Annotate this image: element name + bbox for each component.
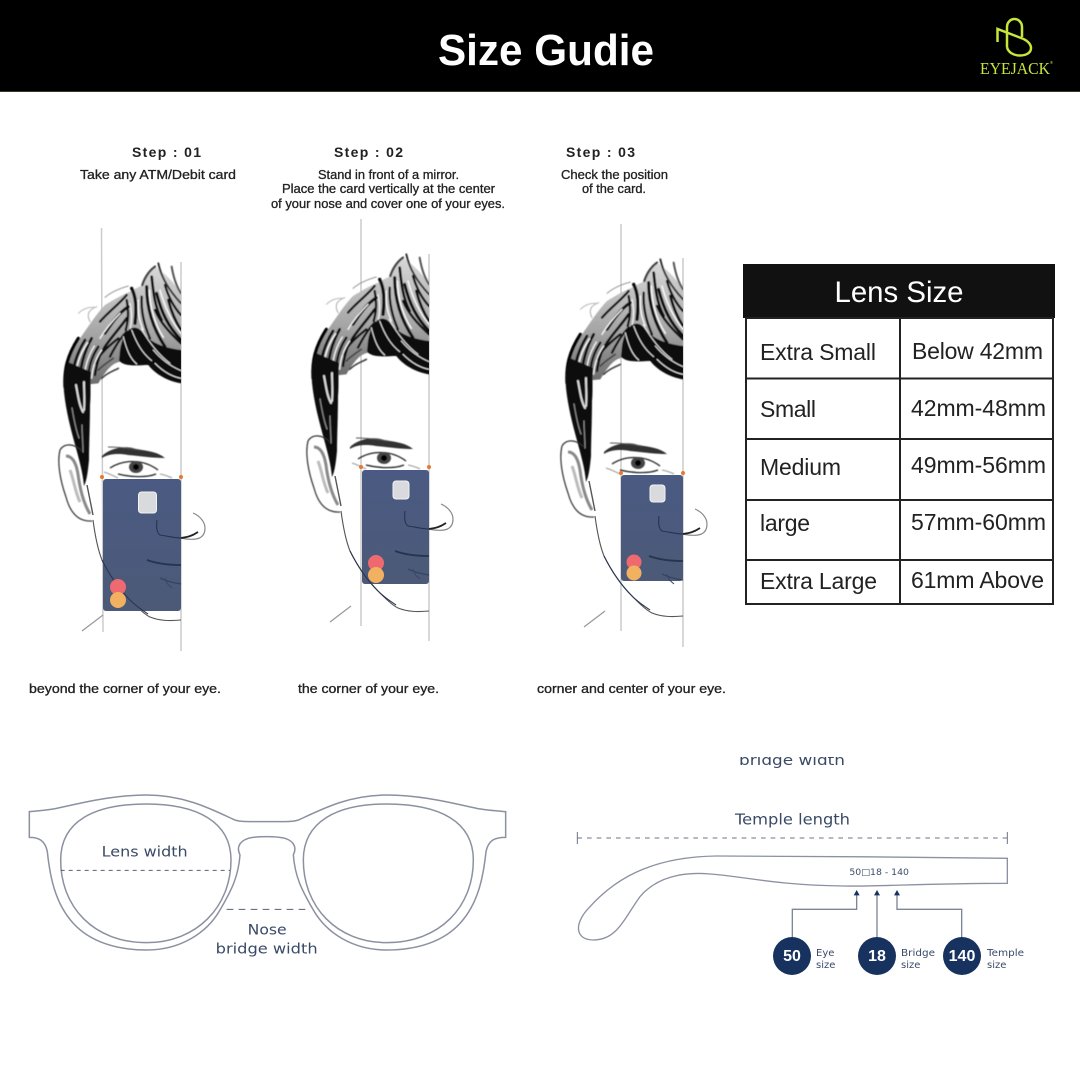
header bar — [0, 0, 1080, 92]
table rows: Below 42mm — [912, 338, 1043, 364]
face illustration 3 with card — [561, 224, 707, 647]
step 1 heading: Step : 01 — [132, 144, 201, 160]
table rows: 49mm-56mm — [911, 452, 1046, 478]
nose bridge width label: Nose — [248, 922, 287, 938]
face illustration 2 with card — [307, 219, 453, 641]
temple size print: 50□18 - 140 — [849, 868, 909, 878]
step captions: beyond the corner of your eye. — [29, 682, 221, 696]
frame outline — [29, 795, 506, 950]
table rows: Medium — [760, 454, 841, 480]
table grid — [746, 318, 1053, 604]
badge: bridge size: 18 — [868, 948, 886, 965]
badge: eye size: Eye — [816, 948, 834, 959]
step 2 heading: of your nose and cover one of your eyes. — [271, 197, 505, 211]
clipped bridge width remnant: bridge width — [739, 753, 845, 769]
step 1 heading: Take any ATM/Debit card — [80, 168, 236, 182]
logo: Eyejack — [980, 19, 1053, 78]
arrows — [792, 894, 962, 937]
badge: eye size: size — [816, 960, 835, 971]
step 1 heading — [80, 144, 236, 182]
temple arm outline — [578, 856, 1007, 940]
badge: temple size: Temple — [986, 948, 1024, 959]
step 2 heading — [271, 144, 505, 211]
badge: temple size: 140 — [949, 948, 975, 965]
table header — [743, 264, 1055, 318]
face illustration 1 with card — [59, 228, 205, 651]
logo: Eyejack: ® — [1050, 60, 1053, 65]
table rows: Extra Small — [760, 339, 876, 365]
temple length dimension: Temple length — [734, 812, 850, 829]
badge: eye size — [773, 937, 835, 975]
step captions: corner and center of your eye. — [537, 682, 726, 696]
glasses front diagram — [29, 795, 506, 957]
table rows — [760, 338, 1046, 594]
badge: eye size: 50 — [783, 948, 801, 965]
step 3 heading — [561, 144, 668, 196]
table rows: 42mm-48mm — [911, 395, 1046, 421]
badge: bridge size: size — [901, 960, 920, 971]
lens width label: Lens width — [102, 845, 188, 861]
lens size table — [743, 264, 1055, 604]
badge: bridge size: Bridge — [901, 948, 935, 959]
table header: Lens Size — [834, 276, 964, 309]
step 2 heading: Place the card vertically at the center — [282, 182, 495, 196]
badge: bridge size — [858, 937, 935, 975]
step 3 heading: Check the position — [561, 168, 668, 182]
badge: temple size — [943, 937, 1024, 975]
table rows: Extra Large — [760, 568, 877, 594]
table rows: 61mm Above — [911, 567, 1044, 593]
step captions: the corner of your eye. — [298, 682, 439, 696]
nose bridge width label — [216, 909, 318, 957]
table rows: large — [760, 510, 810, 536]
step captions — [29, 682, 726, 696]
nose bridge width label: bridge width — [216, 941, 318, 957]
temple arm diagram — [577, 812, 1007, 940]
step 3 heading: of the card. — [582, 182, 646, 196]
title: Size Gudie — [438, 26, 654, 75]
table rows: 57mm-60mm — [911, 509, 1046, 535]
badge: temple size: size — [987, 960, 1006, 971]
step 2 heading: Stand in front of a mirror. — [318, 168, 459, 182]
step 2 heading: Step : 02 — [334, 144, 403, 160]
logo: Eyejack: EYEJACK — [980, 59, 1050, 78]
left lens — [61, 804, 231, 943]
right lens — [303, 804, 473, 943]
step 3 heading: Step : 03 — [566, 144, 635, 160]
table rows: Small — [760, 396, 816, 422]
size badges — [773, 937, 1024, 975]
